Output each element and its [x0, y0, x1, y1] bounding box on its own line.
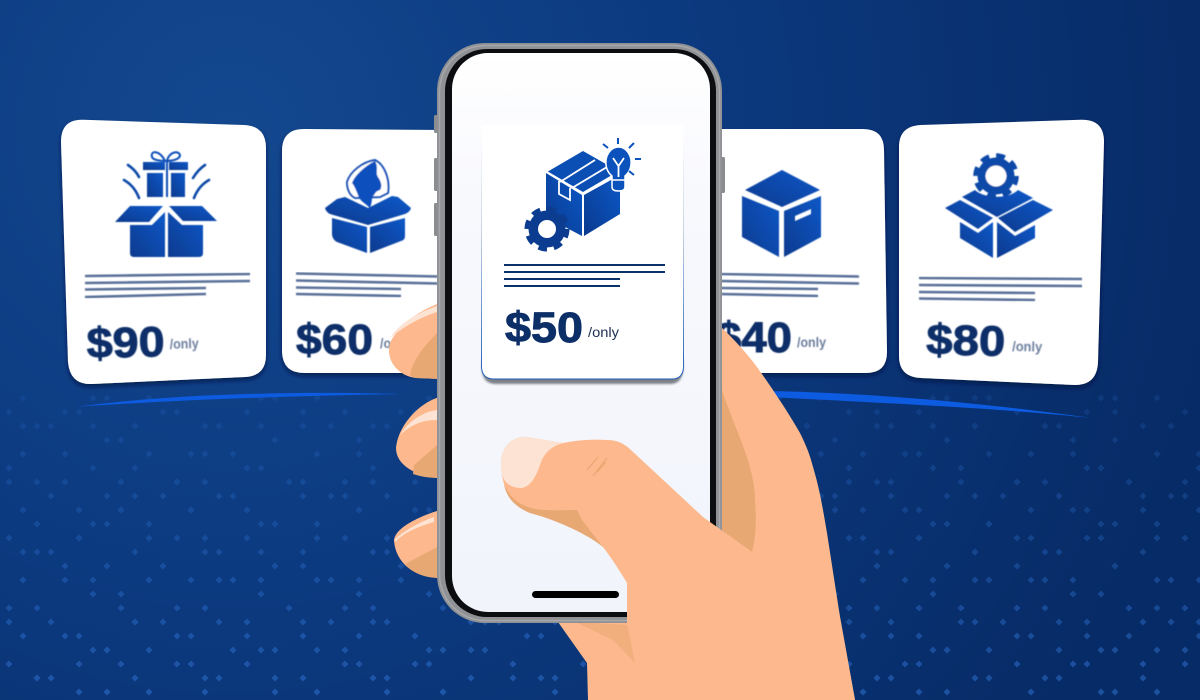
text lines: [720, 274, 859, 296]
price: $60: $60: [296, 316, 373, 364]
palm shadow: [575, 622, 636, 664]
home bar: [532, 591, 619, 598]
icon: open box with gear: [945, 156, 1053, 258]
index finger: [389, 303, 440, 379]
shadow behind phone: [703, 390, 756, 552]
palm below the phone: [558, 622, 640, 700]
panel: $80 card: [899, 120, 1104, 385]
price: $50: [505, 304, 619, 352]
text lines: [85, 274, 250, 297]
panel: $50 card: [482, 125, 684, 384]
thumbnail: [501, 437, 563, 488]
arc: right blue swoosh: [770, 391, 1091, 418]
price: $90: $90: [86, 318, 165, 368]
arc: left blue swoosh: [75, 393, 402, 407]
icon: open gift box: [115, 152, 217, 257]
hand: thumb and palm in front of the phone: [501, 437, 855, 700]
back of hand right of phone: [620, 328, 855, 700]
text lines: [504, 265, 665, 286]
knuckle creases: [587, 457, 607, 476]
price: $60: [296, 316, 409, 364]
phone: [434, 43, 725, 623]
phone body: [437, 43, 722, 623]
price: $80: /only: [1012, 338, 1043, 355]
light bulb: [603, 138, 641, 191]
hand: fingers and palm behind the phone: [389, 303, 855, 700]
icon: closed cube box: [742, 170, 821, 257]
price: $50: $50: [505, 304, 583, 352]
price: $80: $80: [926, 316, 1006, 366]
panel: $40 card: [715, 129, 887, 373]
icon: box with bell shape: [325, 160, 411, 253]
ring finger: [394, 510, 440, 578]
screen: [452, 53, 710, 612]
price: $80: [926, 316, 1043, 367]
icon: parcel, gear and bulb: [527, 138, 641, 249]
price: $40: /only: [797, 334, 826, 350]
price: $50: /only: [588, 324, 619, 340]
price: $40: $40: [716, 314, 792, 362]
panel: $90 card: [61, 120, 266, 384]
text lines: [919, 278, 1082, 300]
price: $90: /only: [169, 335, 199, 352]
price: $90: [86, 317, 199, 368]
middle finger: [396, 397, 440, 478]
thumb shadow: [504, 484, 603, 547]
text lines: [296, 274, 438, 296]
gear: [527, 209, 567, 249]
price: $60: /only: [380, 335, 409, 351]
price: $40: [716, 314, 826, 362]
panel: $60 card: [282, 129, 445, 373]
side buttons: [434, 115, 725, 236]
